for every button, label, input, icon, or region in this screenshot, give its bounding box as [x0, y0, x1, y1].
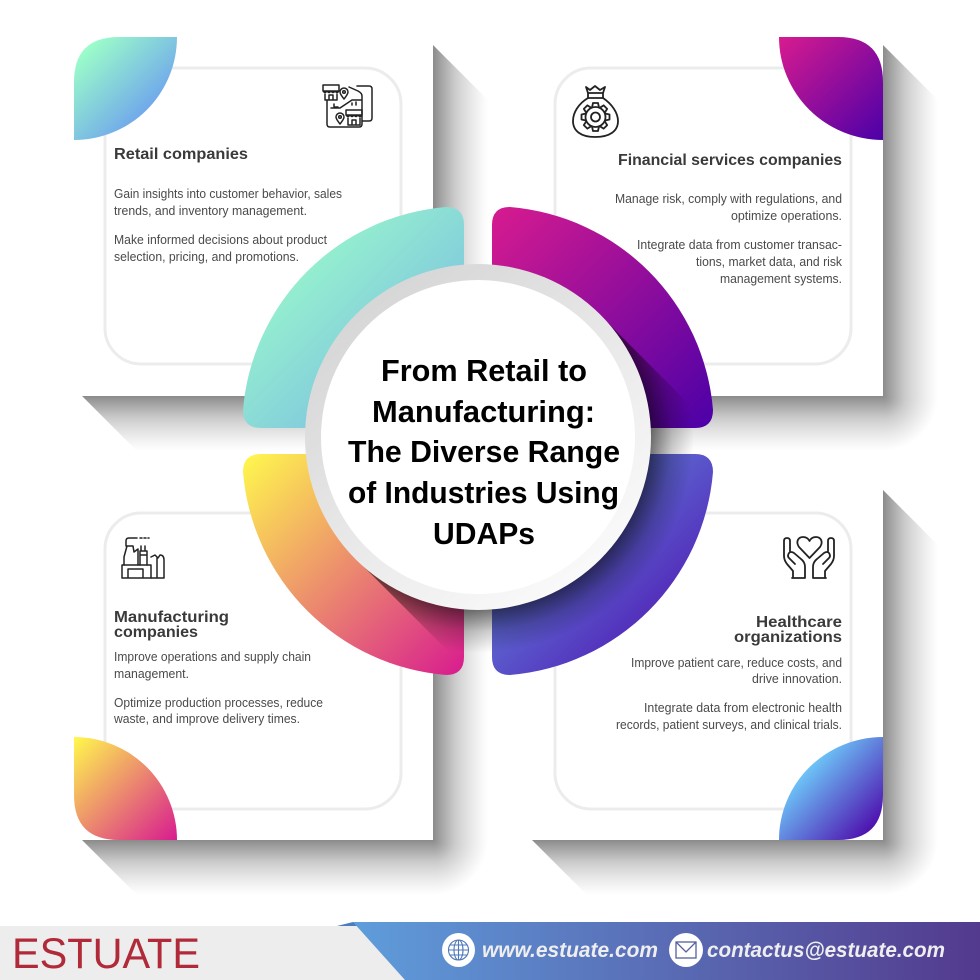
icon: factory [122, 538, 164, 578]
heading: healthcare: Healthcare [756, 614, 842, 631]
text block: financial: optimize operations. [731, 209, 842, 223]
heading: healthcare [734, 614, 842, 646]
title: of Industries Using [348, 476, 619, 510]
arc: top left [243, 207, 464, 428]
text block: retail: Gain insights into customer behavior, sales [114, 187, 342, 201]
text block: manufacturing: Improve operations and supply chain [114, 650, 311, 664]
text block: healthcare [616, 656, 842, 732]
icon: money bag with gear [573, 86, 618, 137]
icon: store map [323, 85, 372, 127]
title: Manufacturing: [372, 395, 595, 429]
footer [0, 922, 980, 980]
text block: retail: Make informed decisions about product [114, 233, 328, 247]
title: The Diverse Range [348, 435, 620, 469]
petal: healthcare [779, 737, 883, 840]
text block: financial: Integrate data from customer transac- [637, 238, 842, 252]
text block: healthcare: Improve patient care, reduce costs, and [631, 656, 842, 670]
heading: retail: Retail companies [114, 146, 248, 163]
heading: manufacturing: companies [114, 624, 198, 641]
panel: financial services companies [523, 37, 938, 451]
text block: retail: trends, and inventory management. [114, 204, 307, 218]
text block: financial: Manage risk, comply with regulations, and [615, 192, 842, 206]
text block: retail: selection, pricing, and promotions. [114, 250, 299, 264]
arc: bottom right [492, 454, 713, 675]
title [348, 354, 620, 551]
icon: globe [442, 933, 475, 967]
icon: mail [669, 933, 703, 967]
logo: ESTUATE [12, 930, 200, 978]
email: contactus@estuate.com [707, 939, 945, 962]
arc: top right [492, 207, 713, 428]
text block: healthcare: Integrate data from electronic health [644, 701, 842, 715]
panel: manufacturing companies [74, 481, 488, 895]
website: www.estuate.com [482, 939, 658, 962]
petal: financial [779, 37, 883, 140]
panel: healthcare organizations [523, 481, 938, 895]
text block: financial: tions, market data, and risk [696, 255, 843, 269]
text block: manufacturing: waste, and improve delivery times. [113, 712, 300, 726]
title: UDAPs [433, 517, 535, 551]
text block: financial: management systems. [720, 272, 842, 286]
petal: manufacturing [74, 737, 177, 840]
panel: retail companies [74, 37, 488, 451]
arc: bottom left [243, 454, 464, 675]
text block: manufacturing: management. [114, 667, 189, 681]
title: From Retail to [381, 354, 587, 388]
icon: hands holding heart [784, 537, 834, 578]
circle long shadow [363, 322, 690, 650]
heading: manufacturing [114, 609, 229, 641]
heading: manufacturing: Manufacturing [114, 609, 229, 626]
text block: retail [114, 187, 342, 264]
text block: healthcare: records, patient surveys, and clinical trials. [616, 718, 842, 732]
heading: healthcare: organizations [734, 629, 842, 646]
text block: manufacturing: Optimize production processes, reduce [114, 696, 323, 710]
text block: manufacturing [113, 650, 323, 726]
text block: healthcare: drive innovation. [752, 672, 842, 686]
text block: financial [615, 192, 843, 286]
heading: financial: Financial services companies [618, 152, 842, 169]
center circle [305, 264, 651, 610]
petal: retail [74, 37, 177, 140]
